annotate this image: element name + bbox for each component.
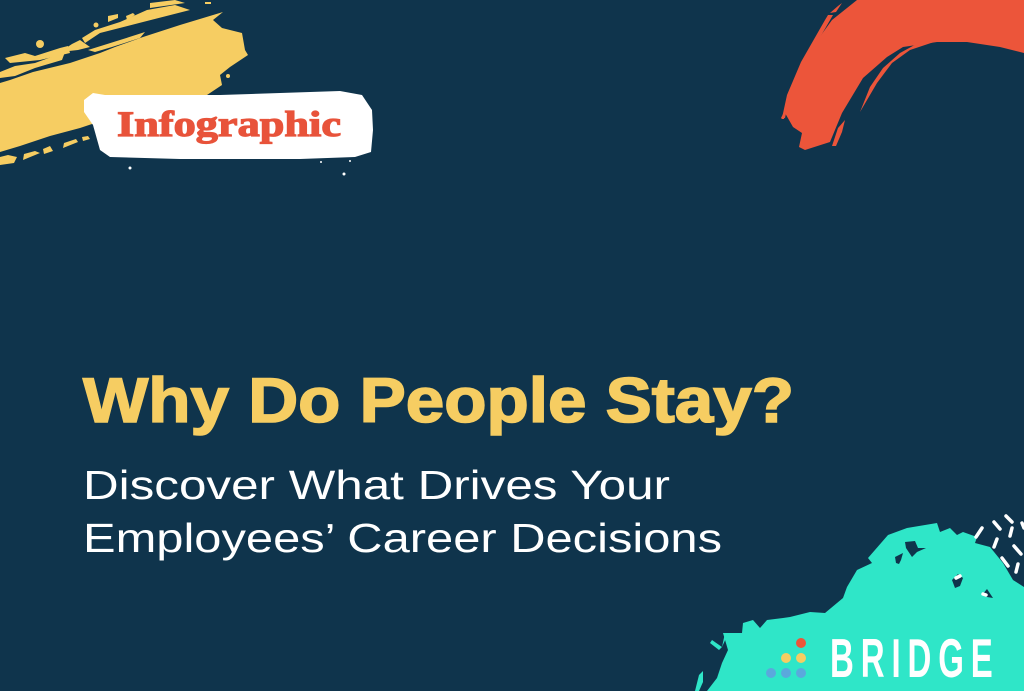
yellow brush stroke xyxy=(0,0,248,165)
logo dots xyxy=(766,638,806,678)
white label brush xyxy=(84,91,373,176)
subtitle xyxy=(83,462,722,561)
logo wordmark: BRIDGE xyxy=(830,627,1000,689)
Bridge logo xyxy=(766,627,1000,689)
white speckles xyxy=(956,516,1024,595)
teal brush inner nicks xyxy=(895,541,993,598)
subtitle: Discover What Drives Your xyxy=(83,462,670,508)
orange brush stroke xyxy=(781,0,1024,150)
subtitle: Employees’ Career Decisions xyxy=(83,515,722,561)
title: Why Do People Stay? xyxy=(83,366,794,436)
teal brush stroke xyxy=(695,523,1024,691)
label text: Infographic: Infographic xyxy=(117,104,341,144)
